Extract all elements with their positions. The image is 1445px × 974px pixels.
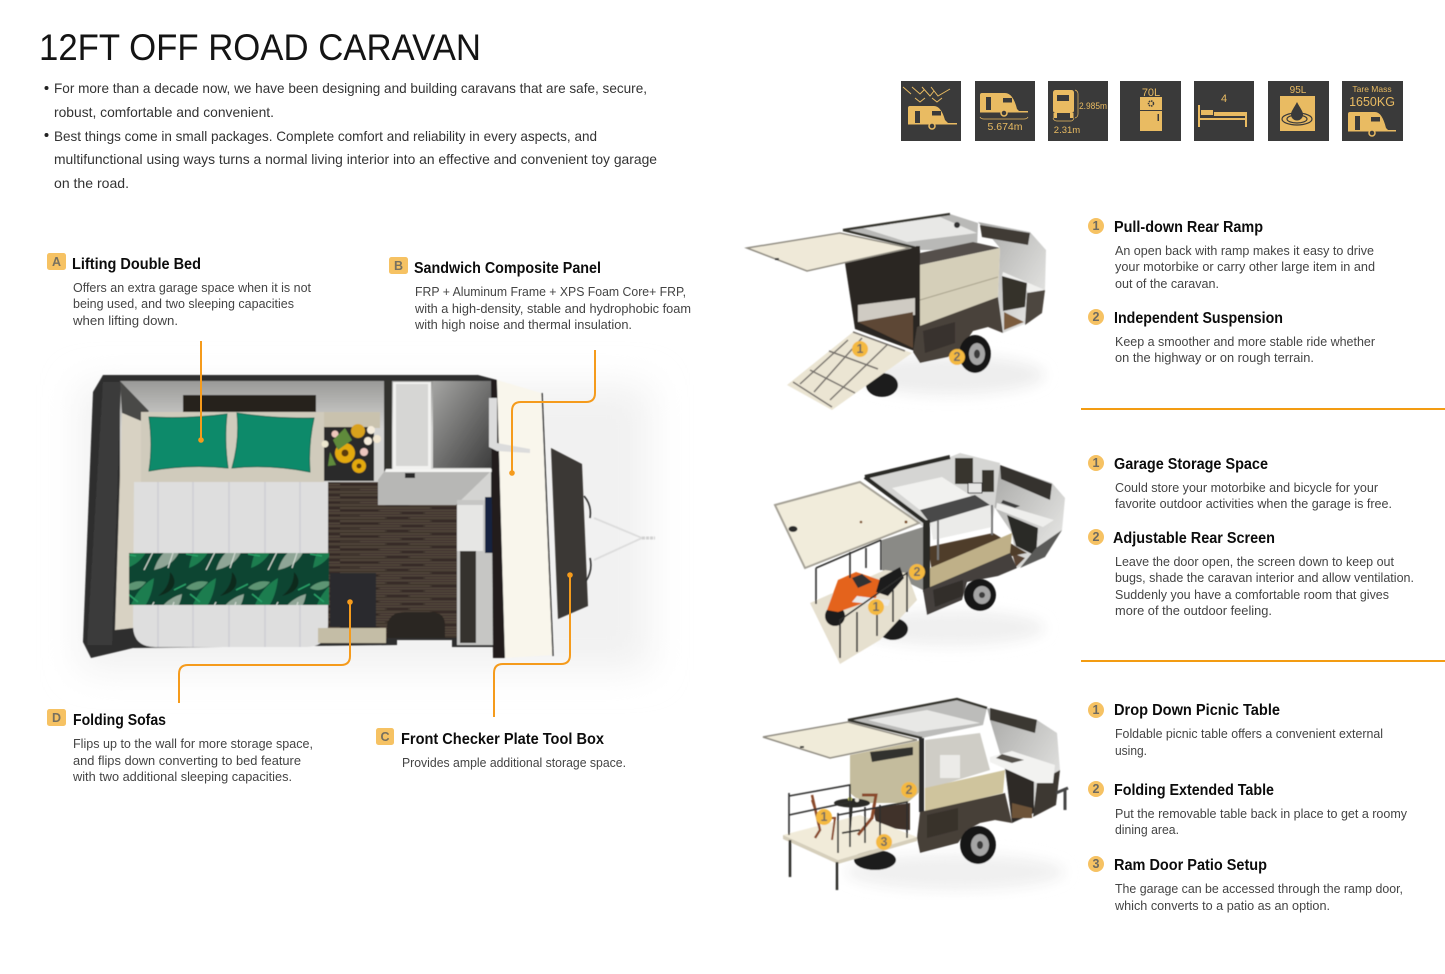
callout A: lifting double bed	[47, 253, 311, 328]
bed head platform	[141, 412, 324, 483]
panel: caravan top-view floor plan	[83, 375, 655, 658]
lower body	[917, 793, 1012, 853]
callout C: front checker plate tool box: Front Checker Plate Tool Box	[401, 731, 604, 748]
features list: garage and rear screen: Garage Storage Space	[1114, 456, 1268, 473]
features list: table and patio: Ram Door Patio Setup	[1114, 857, 1267, 874]
marker 1	[868, 599, 884, 615]
features list: garage and rear screen	[1088, 455, 1414, 618]
side cream strip	[115, 413, 141, 630]
pillow left	[149, 414, 228, 471]
marker 1: 1	[873, 600, 880, 614]
folding sofa	[330, 573, 376, 627]
spec icons row	[901, 81, 1403, 141]
ramp	[810, 570, 917, 664]
shower unit	[378, 469, 493, 505]
marker 1	[852, 341, 868, 357]
features list: table and patio: using.	[1115, 743, 1147, 758]
callout B: sandwich composite panel	[389, 257, 691, 332]
callout B: sandwich composite panel: with high noise and thermal insulation.	[414, 317, 632, 332]
garage interior	[882, 527, 923, 590]
features list: garage and rear screen: Suddenly you have a comfortable room that gives	[1115, 587, 1389, 602]
callout A: lifting double bed: A	[52, 255, 61, 269]
features list: table and patio: which converts to a patio as an option.	[1114, 898, 1330, 913]
marker 2	[949, 349, 965, 365]
platform legs	[790, 840, 837, 890]
pillar	[923, 520, 930, 592]
features list: table and patio: Foldable picnic table offers a convenient external	[1115, 726, 1383, 741]
shell side band	[491, 380, 505, 658]
callout B: sandwich composite panel: with a high-density, stable and hydrophobic foam	[414, 301, 691, 316]
features list: table and patio: 1	[1093, 703, 1100, 717]
lower body	[923, 553, 1017, 615]
callout D: folding sofas: with two additional sleeping capacities.	[72, 769, 292, 784]
callout D: folding sofas: and flips down converting to bed feature	[73, 753, 301, 768]
features list: table and patio: 3	[1093, 857, 1100, 871]
tropical throw blanket	[129, 553, 329, 605]
features list: garage and rear screen: Could store your motorbike and bicycle for your	[1115, 480, 1379, 495]
door awning	[747, 233, 910, 271]
callout C: front checker plate tool box	[376, 728, 626, 770]
intro text block: Best things come in small packages. Complete comfort and reliability in every aspects, and	[54, 128, 597, 144]
callout A: lifting double bed: being used, and two sleeping capacities	[73, 296, 294, 311]
roof frame and bed	[843, 214, 978, 250]
interior view	[925, 733, 990, 790]
callout C: front checker plate tool box: Provides ample additional storage space.	[402, 755, 626, 770]
marker 2: 2	[906, 783, 913, 797]
icon: width and height: 2.985m	[1079, 101, 1107, 111]
callout C: front checker plate tool box: C	[380, 730, 390, 744]
rear living section	[993, 465, 1065, 568]
features list: ramp and suspension: 1	[1093, 219, 1100, 233]
mattress	[133, 482, 328, 647]
outer shell	[83, 375, 505, 658]
icon: solar panel caravan	[901, 81, 961, 141]
features list: ramp and suspension: on the highway or on rough terrain.	[1115, 350, 1314, 365]
picnic table and chairs	[812, 795, 876, 840]
spare tyre	[854, 850, 896, 870]
front cream panel	[497, 380, 553, 658]
callout D: folding sofas: D	[52, 711, 61, 725]
features list: table and patio: Drop Down Picnic Table	[1114, 702, 1280, 719]
icon: length 5.674m: 5.674m	[987, 121, 1023, 133]
features list: table and patio: dining area.	[1115, 822, 1179, 837]
features list: ramp and suspension: out of the caravan.	[1115, 276, 1219, 291]
rear back wall	[120, 381, 491, 500]
rear door diagonal	[120, 381, 149, 421]
tongue	[1056, 788, 1068, 810]
door awning	[763, 722, 917, 758]
icon: tare mass 1650KG: 1650KG	[1349, 95, 1395, 109]
soft shadow behind floor plan	[80, 385, 650, 670]
pillow right	[232, 413, 314, 472]
wheel	[964, 579, 996, 611]
orange leader line A	[198, 341, 204, 443]
intro text block: robust, comfortable and convenient.	[54, 104, 274, 120]
intro text block: For more than a decade now, we have been designing and building caravans that are safe, secure,	[54, 80, 647, 96]
orange leader line B	[509, 350, 595, 476]
icon: width and height	[1048, 81, 1108, 141]
marker 2	[909, 564, 925, 580]
marker 1	[816, 809, 832, 825]
flower bouquet	[322, 424, 381, 473]
icon: 70L fridge: 70L	[1142, 87, 1160, 99]
callout B: sandwich composite panel: Sandwich Composite Panel	[414, 260, 601, 277]
illustration: caravan with pull-down ramp	[747, 214, 1046, 410]
rails	[816, 540, 907, 658]
kitchen bench	[457, 500, 493, 645]
icon: tare mass 1650KG: Tare Mass	[1352, 84, 1392, 94]
spare tyre	[878, 618, 908, 640]
roof frame	[865, 453, 1000, 527]
orange leader line D	[179, 599, 353, 703]
rear living section	[987, 708, 1060, 823]
marker 1: 1	[857, 342, 864, 356]
spare tyre	[866, 373, 898, 397]
features list: garage and rear screen: bugs, shade the caravan interior and allow ventilation.	[1115, 570, 1414, 585]
marker 3	[876, 834, 892, 850]
features list: ramp and suspension: Independent Suspension	[1114, 310, 1283, 327]
marker 1: 1	[821, 810, 828, 824]
features list: ramp and suspension: Keep a smoother and more stable ride whether	[1115, 334, 1376, 349]
intro text block: on the road.	[54, 175, 129, 191]
callout D: folding sofas	[47, 709, 313, 784]
intro text block	[44, 80, 657, 191]
bedside table	[324, 427, 374, 481]
orange leader line C	[494, 572, 573, 717]
icon: tare mass 1650KG	[1342, 81, 1403, 141]
features list: table and patio	[1088, 702, 1407, 913]
callout A: lifting double bed: when lifting down.	[72, 313, 178, 328]
features list: table and patio: Folding Extended Table	[1114, 782, 1274, 799]
marker 3: 3	[881, 835, 888, 849]
callout D: folding sofas: Flips up to the wall for more storage space,	[73, 736, 313, 751]
bedside cushion	[324, 412, 380, 428]
side opening above panel	[920, 242, 1000, 265]
features list: garage and rear screen: 1	[1093, 456, 1100, 470]
features list: table and patio: The garage can be accessed through the ramp door,	[1115, 881, 1403, 896]
dark glass partition	[433, 381, 492, 468]
door awning	[775, 482, 919, 568]
rear wheel	[959, 335, 991, 373]
features list: ramp and suspension: 2	[1093, 310, 1100, 324]
callout D: folding sofas: Folding Sofas	[73, 712, 166, 729]
icon: length 5.674m	[975, 81, 1035, 141]
features list: ramp and suspension: Pull-down Rear Ramp	[1114, 219, 1263, 236]
marker 2: 2	[914, 565, 921, 579]
icon: 70L fridge	[1120, 81, 1181, 141]
icon: 4 berth bed: 4	[1221, 93, 1227, 105]
features list: ramp and suspension	[1088, 218, 1376, 365]
motorcycle	[825, 567, 904, 626]
wardrobe cabinet	[384, 380, 392, 500]
features list: ramp and suspension: your motorbike or carry other large item in and	[1115, 259, 1375, 274]
features list: garage and rear screen: favorite outdoor activities when the garage is free.	[1115, 496, 1392, 511]
patio platform	[783, 815, 917, 860]
drawbar	[584, 496, 591, 581]
rear wall unit	[183, 395, 316, 412]
callout A: lifting double bed: Offers an extra garage space when it is not	[73, 280, 311, 295]
ramp	[787, 332, 912, 410]
interior wood	[928, 533, 1027, 572]
features list: table and patio: 2	[1093, 782, 1100, 796]
marker 2	[901, 782, 917, 798]
interior open side	[845, 247, 917, 352]
icon: 4 berth bed	[1194, 81, 1254, 141]
features list: garage and rear screen: Adjustable Rear Screen	[1113, 530, 1275, 547]
callout B: sandwich composite panel: FRP + Aluminum Frame + XPS Foam Core+ FRP,	[415, 284, 686, 299]
illustration: caravan with patio setup	[763, 699, 1068, 890]
features list: ramp and suspension: An open back with ramp makes it easy to drive	[1115, 243, 1374, 258]
icon: 95L water tank: 95L	[1290, 85, 1307, 96]
rear living section	[978, 222, 1046, 333]
wheel	[960, 826, 996, 864]
roof frame and bed	[848, 699, 987, 738]
features list: garage and rear screen: 2	[1093, 530, 1100, 544]
rear door band	[87, 382, 121, 645]
lower body	[913, 297, 1003, 363]
side panel tan	[930, 533, 1012, 588]
icon: width and height: 2.31m	[1054, 125, 1080, 136]
illustration: caravan with motorbike in garage	[775, 453, 1065, 664]
rails	[789, 785, 907, 853]
side panel beige	[920, 248, 1000, 327]
checker plate tool box	[551, 448, 588, 619]
marker 2: 2	[954, 350, 961, 364]
features list: table and patio: Put the removable table back in place to get a roomy	[1115, 806, 1407, 821]
intro text block: multifunctional using ways turns a normal living interior into an effective and convenient toy garage	[54, 151, 657, 167]
interior floor	[328, 482, 460, 638]
callout B: sandwich composite panel: B	[394, 259, 403, 273]
icon: 95L water tank	[1268, 81, 1329, 141]
features list: garage and rear screen: more of the outdoor feeling.	[1115, 603, 1272, 618]
interior back wall	[850, 740, 922, 803]
title: 12FT OFF ROAD CARAVAN	[39, 27, 481, 68]
entry mat	[387, 612, 445, 638]
side panel tan	[925, 770, 1005, 812]
air conditioner	[489, 398, 530, 453]
callout A: lifting double bed: Lifting Double Bed	[72, 256, 201, 273]
features list: garage and rear screen: Leave the door open, the screen down to keep out	[1115, 554, 1394, 569]
